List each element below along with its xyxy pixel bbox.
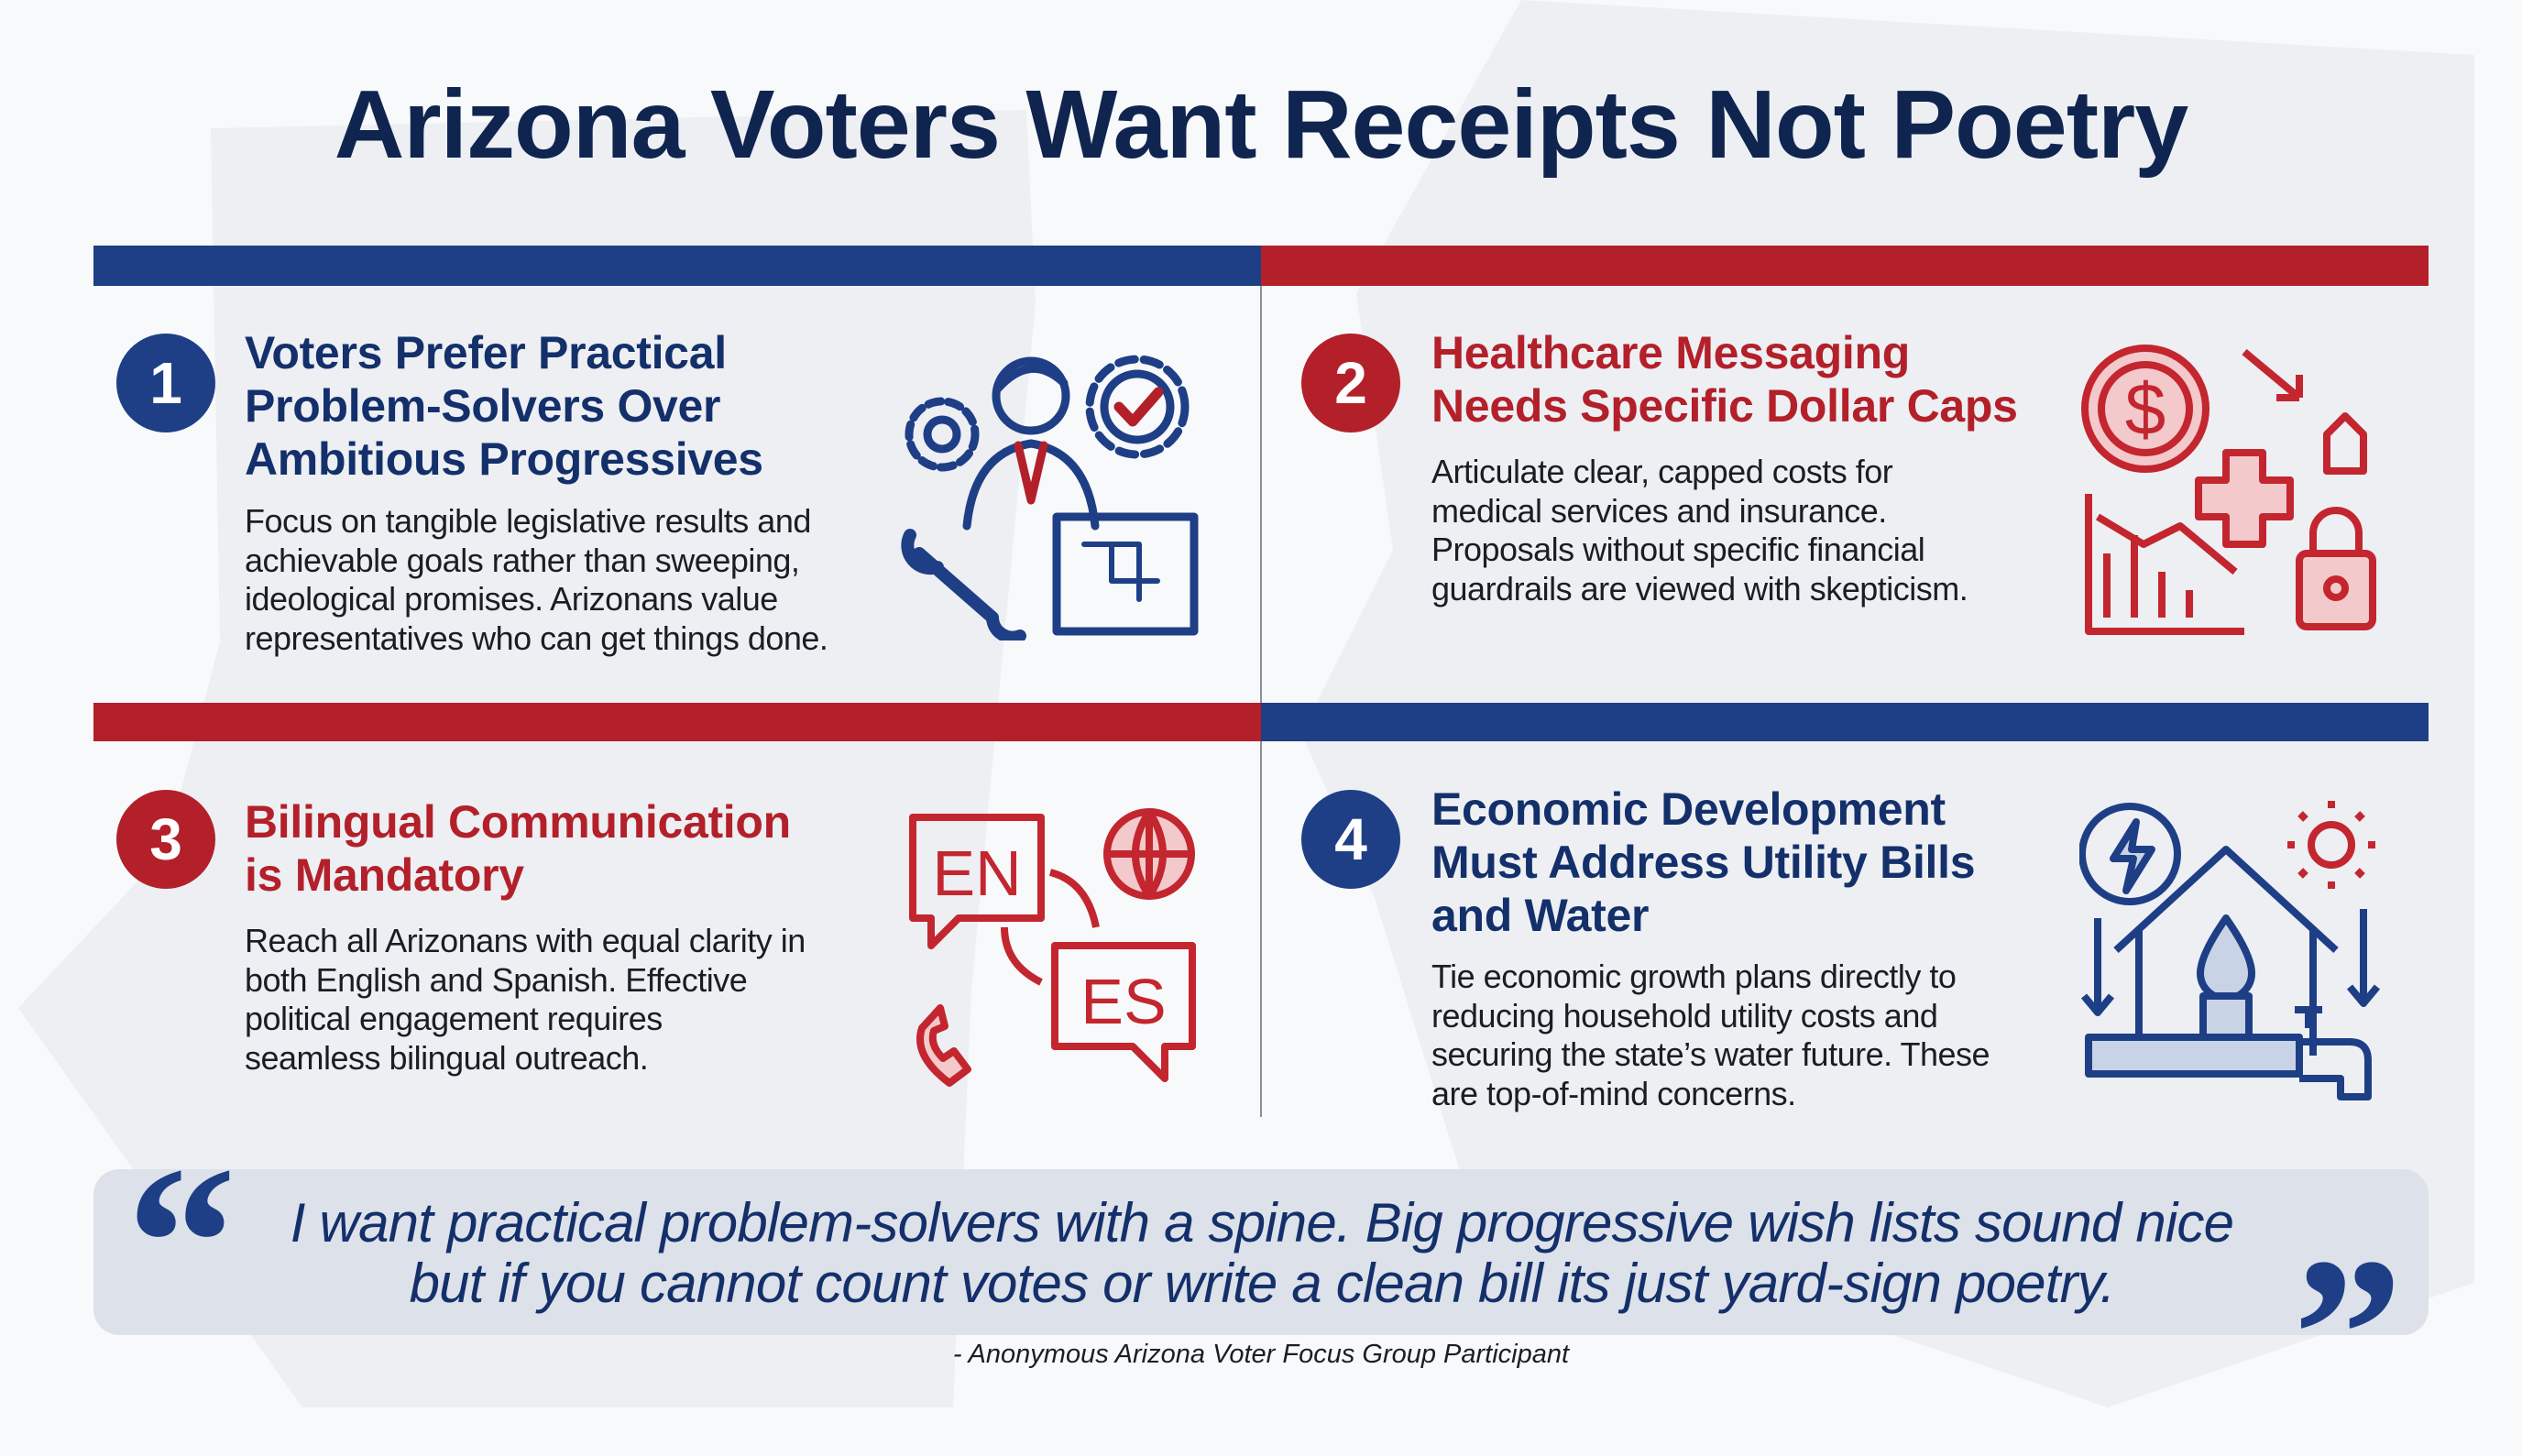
- body 3: political engagement requires: [245, 1000, 663, 1037]
- quote text: but if you cannot count votes or write a clean bill its just yard-sign poetry.: [410, 1253, 2114, 1314]
- icon: worker with gears: [901, 356, 1199, 640]
- body 3: both English and Spanish. Effective: [245, 960, 747, 999]
- body 4: securing the state’s water future. These: [1431, 1035, 1990, 1073]
- icon: dollar, cross, lock, chart: [2081, 345, 2376, 635]
- quote box: [93, 1169, 2429, 1335]
- middle bars: [93, 703, 2429, 741]
- badge 1: 1: [149, 350, 182, 416]
- icon: house, water, energy: [2079, 801, 2380, 1100]
- badge 4: 4: [1334, 806, 1367, 872]
- panel 3: [116, 790, 1196, 1087]
- badge 2: 2: [1334, 350, 1367, 416]
- top bars: [93, 246, 2429, 286]
- body 4: reducing household utility costs and: [1431, 997, 1937, 1034]
- heading 1: Problem-Solvers Over: [245, 380, 720, 432]
- heading 4: Economic Development: [1431, 783, 1946, 835]
- body 1: ideological promises. Arizonans value: [245, 580, 778, 618]
- heading 3: is Mandatory: [245, 849, 524, 901]
- body 3: [245, 922, 806, 1076]
- heading 1: Ambitious Progressives: [245, 433, 763, 485]
- heading 4: [1431, 783, 1975, 941]
- quote mark close: ”: [2293, 1212, 2403, 1456]
- icon: dollar, cross, lock, chart: $: [2125, 368, 2166, 450]
- attribution: - Anonymous Arizona Voter Focus Group Participant: [953, 1340, 1569, 1369]
- body 2: Proposals without specific financial: [1431, 531, 1924, 568]
- heading 4: Must Address Utility Bills: [1431, 837, 1975, 888]
- panel 2: [1301, 327, 2376, 635]
- badge 4: [1301, 790, 1400, 889]
- body 2: [1431, 453, 1968, 607]
- badge 2: [1301, 334, 1400, 432]
- body 4: Tie economic growth plans directly to: [1431, 958, 1956, 995]
- body 2: Articulate clear, capped costs for: [1431, 453, 1892, 490]
- title: Arizona Voters Want Receipts Not Poetry: [334, 71, 2188, 179]
- body 3: Reach all Arizonans with equal clarity in: [245, 922, 806, 959]
- badge 3: 3: [149, 806, 182, 872]
- body 1: achievable goals rather than sweeping,: [245, 541, 799, 579]
- heading 1: [245, 327, 763, 485]
- quote mark open: “: [126, 1121, 236, 1364]
- body 2: guardrails are viewed with skepticism.: [1431, 570, 1968, 607]
- panel 1: [116, 327, 1199, 656]
- icon: EN ES bubbles: EN: [932, 837, 1022, 909]
- heading 2: Healthcare Messaging: [1431, 327, 1910, 378]
- body 1: Focus on tangible legislative results and: [245, 502, 811, 540]
- icon: EN ES bubbles: ES: [1080, 966, 1167, 1037]
- body 1: representatives who can get things done.: [245, 619, 828, 656]
- heading 1: Voters Prefer Practical: [245, 327, 727, 378]
- heading 3: Bilingual Communication: [245, 796, 791, 848]
- quote text: I want practical problem-solvers with a spine. Big progressive wish lists sound nice: [291, 1192, 2233, 1253]
- body 2: medical services and insurance.: [1431, 491, 1887, 530]
- heading 2: Needs Specific Dollar Caps: [1431, 380, 2018, 432]
- badge 1: [116, 334, 215, 432]
- badge 3: [116, 790, 215, 889]
- icon: EN ES bubbles: [909, 808, 1196, 1087]
- body 3: seamless bilingual outreach.: [245, 1039, 648, 1076]
- heading 4: and Water: [1431, 890, 1649, 941]
- body 4: are top-of-mind concerns.: [1431, 1074, 1796, 1112]
- panel 4: [1301, 783, 2380, 1112]
- quote text: [291, 1192, 2233, 1314]
- heading 3: [245, 796, 791, 901]
- body 4: [1431, 958, 1990, 1112]
- heading 2: [1431, 327, 2018, 432]
- body 1: [245, 502, 828, 656]
